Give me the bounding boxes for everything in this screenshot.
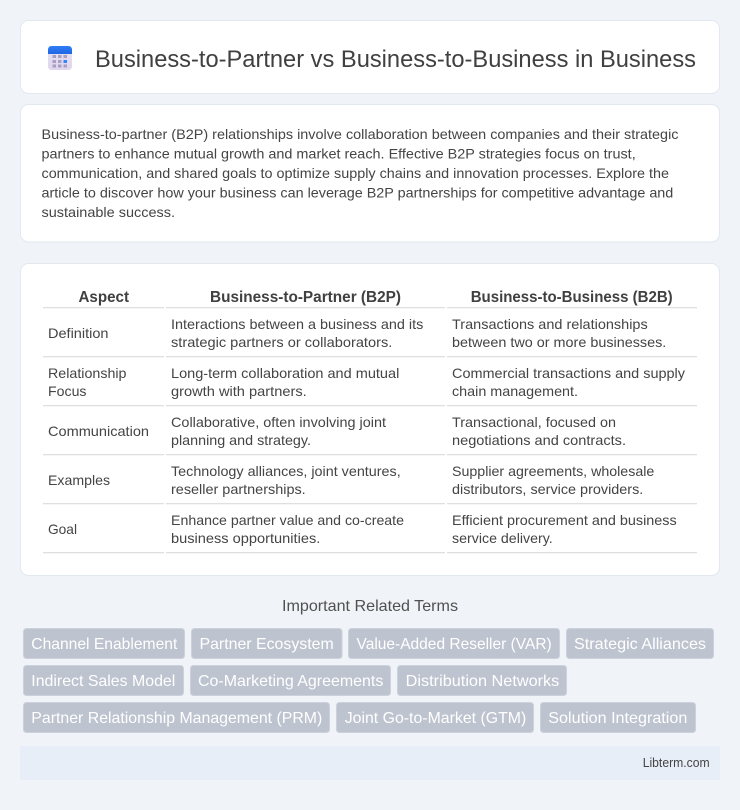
table row: definition: Definition	[48, 325, 108, 341]
table header row	[43, 289, 697, 308]
tag: channel enablement: Channel Enablement	[31, 636, 178, 653]
table row: definition: strategic partners or collaborators.	[171, 334, 392, 350]
table row: examples: Technology alliances, joint ventures,	[171, 463, 401, 479]
table row: communication: planning and strategy.	[171, 432, 311, 448]
tag: channel enablement	[24, 628, 184, 658]
tag: joint go-to-market	[336, 702, 534, 732]
table row: relationship focus: Focus	[48, 383, 86, 399]
footer	[20, 746, 720, 780]
title: Business-to-Partner vs Business-to-Business in Business	[95, 46, 696, 73]
table row: examples: Supplier agreements, wholesale	[452, 463, 655, 479]
tag: strategic alliances: Strategic Alliances	[574, 636, 706, 653]
table row: goal: service delivery.	[452, 530, 553, 546]
tag: value-added reseller: Value-Added Reseller (VAR)	[356, 636, 552, 653]
table row: goal: business opportunities.	[171, 530, 320, 546]
table row: definition	[43, 316, 697, 357]
table row: communication: Collaborative, often involving joint	[171, 414, 386, 430]
text block: introduction: article to discover how your business can leverage B2P partnerships for competitive advantage and	[42, 184, 673, 200]
table row: definition: Interactions between a business and its	[171, 316, 423, 332]
table row: relationship focus: growth with partners.	[171, 383, 307, 399]
table row: goal: Enhance partner value and co-create	[171, 512, 404, 528]
tag: strategic alliances	[566, 628, 714, 658]
panel: related term tags	[24, 628, 714, 732]
table row: relationship focus: chain management.	[452, 383, 578, 399]
table row: examples: distributors, service providers.	[452, 481, 643, 497]
tag: indirect sales model: Indirect Sales Model	[31, 673, 175, 690]
table row: relationship focus: Long-term collaboration and mutual	[171, 365, 399, 381]
table row: communication: negotiations and contracts.	[452, 432, 626, 448]
tag: solution integration: Solution Integration	[548, 710, 687, 727]
table row: goal	[43, 512, 697, 553]
tag: indirect sales model	[24, 666, 184, 696]
tag: partner relationship management	[24, 702, 330, 732]
panel: comparison table	[20, 264, 720, 576]
text block: introduction	[42, 126, 678, 220]
table header row: Business-to-Business (B2B)	[471, 289, 673, 306]
tag: partner ecosystem	[192, 628, 342, 658]
table header row: Business-to-Partner (B2P)	[210, 289, 401, 306]
icon: calendar	[48, 46, 72, 70]
table row: examples	[43, 463, 697, 504]
table row: relationship focus: Relationship	[48, 365, 127, 381]
tag: joint go-to-market: Joint Go-to-Market (GTM)	[345, 710, 526, 727]
table row: communication	[43, 414, 697, 455]
table row: relationship focus	[43, 365, 697, 406]
panel: header	[20, 20, 720, 94]
table row: examples: Examples	[48, 472, 110, 488]
text block: introduction: Business-to-partner (B2P) relationships involve collaboration between companies and their strategic	[42, 126, 678, 142]
tag: distribution networks	[398, 666, 566, 696]
text block: introduction: communication, and shared goals to optimize supply chains and innovation processes. Explore the	[42, 165, 669, 181]
tag: value-added reseller	[348, 628, 560, 658]
table row: definition: Transactions and relationships	[452, 316, 648, 332]
text block: introduction: partners to enhance mutual growth and market reach. Effective B2P strategies focus on trust,	[42, 146, 636, 162]
heading: important related terms: Important Related Terms	[282, 598, 458, 615]
tag: partner relationship management: Partner Relationship Management (PRM)	[31, 710, 322, 727]
table row: definition: between two or more businesses.	[452, 334, 666, 350]
table row: goal: Efficient procurement and business	[452, 512, 677, 528]
text block: introduction: sustainable success.	[42, 204, 175, 220]
tag: solution integration	[540, 702, 696, 732]
tag: partner ecosystem: Partner Ecosystem	[200, 636, 334, 653]
tag: distribution networks: Distribution Networks	[406, 673, 559, 690]
table row: goal: Goal	[48, 521, 77, 537]
table header row: Aspect	[78, 289, 130, 306]
table row: communication: Transactional, focused on	[452, 414, 616, 430]
footer credit: Libterm.com	[643, 756, 710, 770]
tag: co-marketing agreements: Co-Marketing Agreements	[198, 673, 383, 690]
table row: communication: Communication	[48, 423, 149, 439]
table row: relationship focus: Commercial transactions and supply	[452, 365, 685, 381]
panel: introduction	[20, 104, 720, 242]
table row: examples: reseller partnerships.	[171, 481, 306, 497]
tag: co-marketing agreements	[190, 666, 390, 696]
